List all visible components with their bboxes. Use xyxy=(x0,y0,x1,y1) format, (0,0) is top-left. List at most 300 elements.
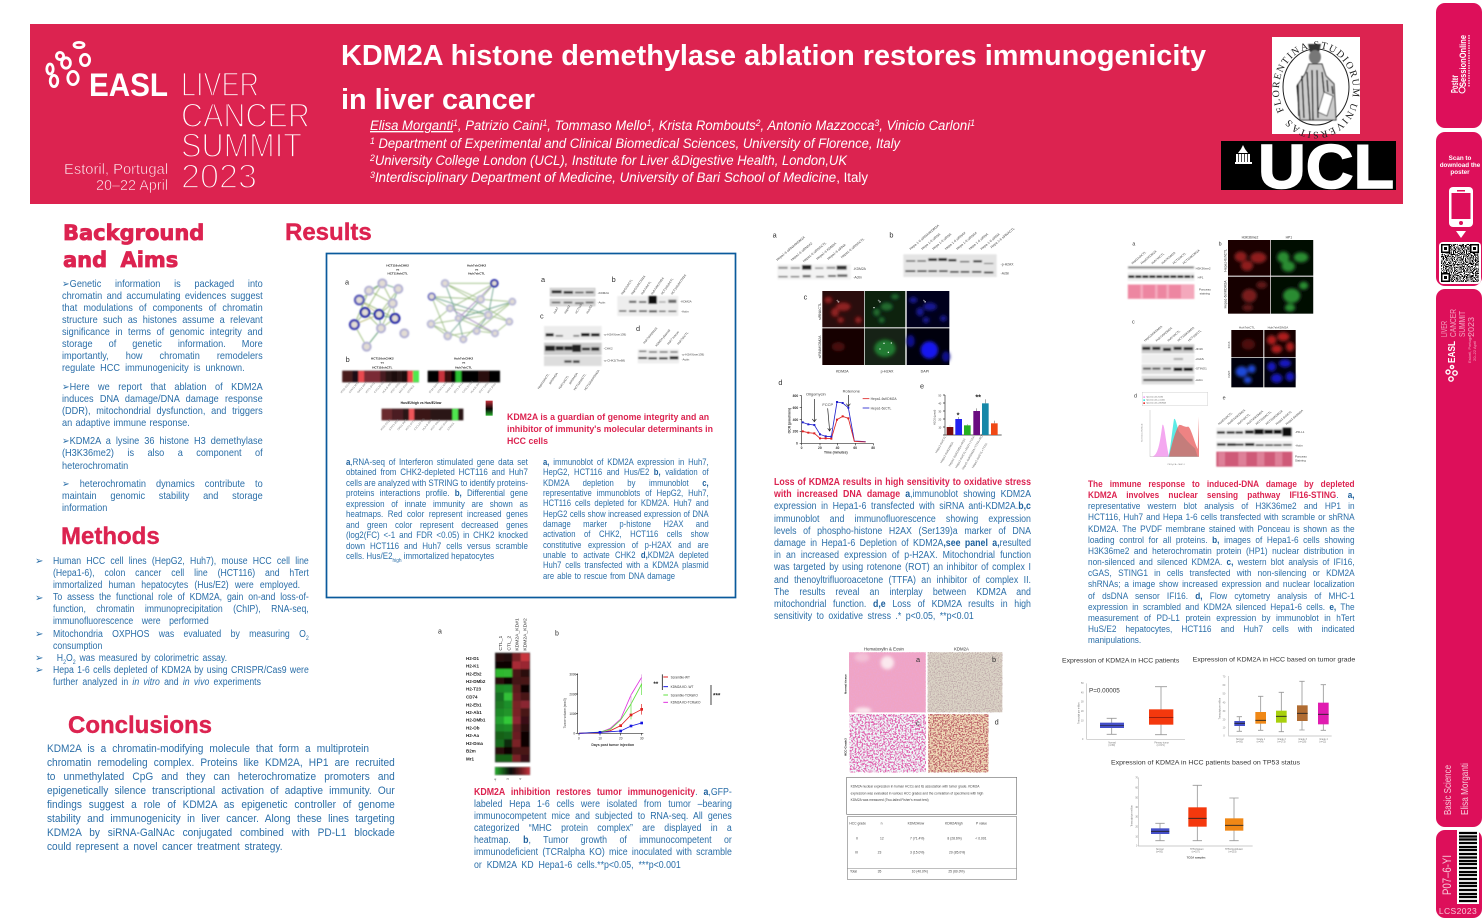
heading: Background and Aims xyxy=(63,221,204,272)
text: results caption right: activation of CHK2, HCT116 cells show xyxy=(543,528,709,539)
conference name: SUMMIT xyxy=(181,127,302,165)
figure: MHC heatmap: CTL_2 xyxy=(506,635,512,651)
network: Huh7 xyxy=(428,280,515,342)
heatmap gene labels: IFIT1 IFIT3 xyxy=(404,418,416,431)
sidebar: poster id and barcode xyxy=(1436,830,1482,918)
gene labels: H2-K1 xyxy=(466,664,479,669)
box plot: tumour grade: 0 xyxy=(1223,736,1225,738)
immunofluorescence panels: KDM2A xyxy=(836,369,849,373)
chart legend: Scramble-WT xyxy=(671,675,690,679)
figure: STRING networks and innate-immunity heatmaps: Huh7shCHK2 xyxy=(454,357,474,361)
figure: oxidative stress and DNA damage: b xyxy=(889,231,893,240)
blot labels: -KDM2A xyxy=(598,291,609,295)
heatmap gene labels: STING1 xyxy=(406,384,416,394)
text: oxidative stress caption: with increased DNA damage a,immunoblot showing KDM2A xyxy=(774,489,1031,500)
heatmap gene labels: IFIT1 IFIT3 xyxy=(453,381,465,394)
immunofluorescence panels: DAPI xyxy=(921,369,929,373)
authors and affiliations: , Antonio Mazzocca xyxy=(761,118,875,133)
authors and affiliations: 1 xyxy=(970,118,975,128)
chart: ROS bars: Hepa1-6siKDM2A+TTFA+ROT xyxy=(961,433,985,470)
blot labels: shKDM2A xyxy=(548,372,559,385)
chart titles: Expression of KDM2A in HCC based on tumor grade xyxy=(1193,656,1356,663)
box plot: tumour grade: Transcript per million xyxy=(1219,697,1222,719)
immunofluorescence panels: ⇘ xyxy=(923,298,927,303)
heatmap gene labels: OAS1 IRF7 xyxy=(356,381,368,394)
heatmap 3 xyxy=(382,409,463,420)
authors and affiliations: University College London (UCL), Institute for Liver &Digestive Health, London,UK xyxy=(375,153,848,168)
table: grade vs KDM2A: 25 (60.0%) xyxy=(948,869,965,873)
gene labels: H2-DMb1 xyxy=(466,718,486,723)
heatmap gene labels: IFI27 OAS2 xyxy=(478,380,490,394)
figure: IFI16-STING pathway: a xyxy=(1132,242,1135,248)
text: tumor immunogenicity caption: immunocompetent mice and subjected to RNA-seq. All genes xyxy=(474,811,732,822)
box plot: TP53 status: 0 xyxy=(1136,846,1138,848)
box plot: TP53 status: (n=50) xyxy=(1156,852,1163,854)
chart legend: Scramble-TCRaKO xyxy=(671,693,698,697)
figure: oxidative stress and DNA damage: c xyxy=(804,293,808,302)
text: nuclear sensing pathway caption: The immune response to induced-DNA damage by depleted xyxy=(1088,479,1355,490)
text: results caption right: representative immunoblots of HepG2, Huh7, xyxy=(543,487,709,498)
network: HCT116 xyxy=(350,279,408,351)
chart: ROS bars: H2O2 (µmol) xyxy=(933,410,937,425)
heatmap gene labels: STING1 xyxy=(446,421,456,431)
text: results caption left: a,RNA-seq of Interferon stimulated gene data set xyxy=(346,456,528,467)
chart: oxygen consumption: Hepa1-6sKDM2A xyxy=(871,397,897,401)
blot labels: HepG2shCTL xyxy=(1130,250,1147,265)
colour scale xyxy=(494,767,530,781)
table: grade vs KDM2A: 7 (71.4%) xyxy=(910,836,924,840)
sidebar: scan to download: download the xyxy=(1440,162,1481,169)
title: in liver cancer xyxy=(341,84,535,116)
chart: oxygen consumption: Time (minutes) xyxy=(824,450,848,454)
paragraph: heterochromatin dynamics xyxy=(62,479,263,514)
text: results caption left: expression of innate immunity are shown as xyxy=(346,498,528,509)
microscopy panels b xyxy=(1224,236,1313,314)
blot labels: HCT116shCTL xyxy=(660,277,675,296)
conference name: LIVER xyxy=(181,66,259,104)
blot labels: Huh7shKDM2A xyxy=(1246,409,1264,426)
box plot: TP53 status: 30 xyxy=(1135,817,1139,819)
box plot: HCC patients: 20 xyxy=(1081,711,1084,713)
blot labels xyxy=(1130,248,1307,462)
chart: ROS bars: ** xyxy=(975,393,981,402)
figure: STRING networks and innate-immunity heatmaps: vs xyxy=(475,267,479,271)
figure: IFI16-STING pathway xyxy=(1128,236,1313,467)
sidebar: scan to download: Scan to xyxy=(1449,155,1472,162)
blot labels: -IFI16 xyxy=(1195,347,1203,351)
box plot: TP53 status: 20 xyxy=(1135,826,1139,828)
authors and affiliations: , Vinicio Carloni xyxy=(879,118,971,133)
blot labels: HCT116CTL xyxy=(1187,329,1203,342)
box plot: HCC patients: P=0.00005 xyxy=(1089,688,1120,695)
box plot: tumour grade: 40 xyxy=(1223,702,1226,704)
box plot: HCC patients: (n=371) xyxy=(1157,745,1165,747)
table note xyxy=(847,777,1017,814)
sidebar: Poster Session Online: Poster xyxy=(1450,75,1461,93)
blot labels: HepG2shCTL xyxy=(537,372,550,390)
text: conclusions: stability and immunogenicity in liver cancer. Along these lines targeting xyxy=(47,813,395,825)
heatmap gene labels: OAS1 IRF7 xyxy=(444,381,456,394)
heatmap gene labels: IFI16 ISG15 xyxy=(379,417,392,431)
box plot: TP53 status: (n=107) xyxy=(1192,852,1200,854)
chart: ROS bars: 10 xyxy=(938,425,942,429)
blot labels: Hepa1-6 siRNA xyxy=(826,242,847,261)
heatmap gene labels: HLA-B IRF9 xyxy=(469,380,482,394)
box plot: HCC patients: Normal xyxy=(1108,741,1116,744)
blot labels: HepG2shKDM2A xyxy=(1143,325,1163,342)
gene labels: H2-DMb2 xyxy=(466,679,486,684)
authors and affiliations: 1 xyxy=(542,118,547,128)
text: nuclear sensing pathway caption: expression in scrambled and KDM2A silenced Hepa1-6 cells. e, The xyxy=(1088,602,1355,613)
blot labels: HCT116KDM2A xyxy=(1265,409,1284,426)
chart: tumour growth xyxy=(555,630,721,747)
table: grade vs KDM2A: 20 (85.0%) xyxy=(949,851,965,855)
text: tumor immunogenicity caption: heatmap. b, Tumor growth of immunocompetent or xyxy=(474,835,732,846)
paragraph: genetic information: significance in terms of genomic integrity and xyxy=(62,327,263,338)
chart: ROS bars xyxy=(933,393,1002,470)
icon: phone xyxy=(1449,187,1473,227)
blot labels: -Actin xyxy=(853,275,862,279)
blot labels: Huh7shCTL xyxy=(676,331,690,346)
authors and affiliations: 3 xyxy=(370,170,375,180)
heatmap gene labels: MX2 IFI44 xyxy=(438,419,449,431)
table: grade vs KDM2A: KDM2Alow xyxy=(908,822,925,826)
heatmap gene labels: IFI27 OAS2 xyxy=(429,418,442,431)
table: grade vs KDM2A: < 0.001 xyxy=(975,836,987,840)
figure: IFI16-STING pathway: c xyxy=(1132,320,1135,326)
microscopy panels c xyxy=(1227,325,1296,387)
blot labels: -cGAS xyxy=(1195,357,1204,361)
blot labels: Hepa1-6 siRNACTL xyxy=(802,241,827,263)
blot labels: Huh7 rescue xyxy=(666,330,680,346)
heatmap gene labels: IFI16 ISG15 xyxy=(339,380,352,394)
box plot: tumour grade: 50 xyxy=(1223,694,1226,696)
paragraph: heterochromatin dynamics: information xyxy=(62,503,107,514)
box plot: TP53 status: TCGA samples xyxy=(1187,856,1206,860)
chart: ROS bars: Hepa1-6siCTL xyxy=(934,435,947,454)
immunofluorescence panels: ⇘ xyxy=(836,298,840,303)
figure: KDM2A histology: a xyxy=(916,655,921,664)
blot labels: -Actin xyxy=(1195,378,1203,382)
chart: oxygen consumption: FCCP xyxy=(822,402,834,407)
text: tumor immunogenicity caption: immunodeficient (TCRalpha KO) mice inoculated with scramble xyxy=(474,847,732,858)
figure: KDM2A immunoblots in liver cell lines: b xyxy=(612,275,616,284)
blot labels: HCT116shCTL xyxy=(573,373,587,391)
blot labels: Huh7shKDM2A xyxy=(650,276,665,296)
blot labels: Huh7shCTL xyxy=(558,374,570,390)
paragraph: genetic information xyxy=(62,279,263,374)
blot labels: Hepa1-6 KDM2A xyxy=(815,241,838,261)
box plot: HCC patients: 30 xyxy=(1081,702,1084,704)
conference name: 2023 xyxy=(181,158,257,196)
paragraph: genetic information: structure such as histones assume a relevant xyxy=(62,315,263,326)
chart: ROS bars: 40 xyxy=(938,401,942,405)
blot labels: HusE2shKDM2A xyxy=(1226,408,1246,426)
gene labels: H2-Ab1 xyxy=(466,710,482,715)
text: methods: consumption xyxy=(53,641,102,652)
text: methods: Human HCC cell lines (HepG2, Huh7), mouse HCC cell line xyxy=(53,556,309,567)
heatmap gene labels: STAT1 MX1 xyxy=(436,380,448,394)
figure: MHC heatmap: KDM2A_KD#1 xyxy=(514,618,520,651)
sidebar: scan to download: poster xyxy=(1450,169,1470,176)
text: oxidative stress caption: and thenoyltrifluoroacetone (TTFA) an inhibitor of complex II. xyxy=(774,574,1031,586)
paragraph: heterochromatin dynamics: maintain genomic stability and storage xyxy=(62,491,263,502)
text: conclusions: epigenetically silence transcriptional activation of adaptive immunity. Our xyxy=(47,785,395,797)
text: ➢ xyxy=(35,665,43,676)
paragraph: ablation of KDM2A: ➢Here we report that ablation of KDM2A xyxy=(62,382,263,393)
logo: University of Florence seal: FLORENTINA STUDIORUM UNIVERSITAS xyxy=(1272,41,1360,138)
immunoblot b xyxy=(903,254,997,277)
box plot: TP53 status: 10 xyxy=(1135,836,1139,838)
text: background and aims xyxy=(62,279,263,514)
sidebar: conference and author: 2023 xyxy=(1467,316,1476,337)
chart: oxygen consumption: 800 xyxy=(793,394,798,398)
blot labels: Hepa 1-6 siRNA xyxy=(968,232,990,251)
box plot: tumour grade: Grade 3 xyxy=(1298,738,1307,741)
conference name xyxy=(64,66,310,196)
text: nuclear sensing pathway caption: representative western blot analysis of H3K36me2 and HP1 in xyxy=(1088,501,1355,512)
chart: ROS bars: * xyxy=(957,410,960,419)
blot labels: Hepa1-6 siRNA#KDM2A xyxy=(775,235,806,262)
blot labels: -Actin xyxy=(598,300,606,304)
paragraph: genetic information: that modulations of components of chromatin xyxy=(62,303,263,314)
blot labels: -KDM2A xyxy=(853,267,867,271)
box plot: HCC patients: 0 xyxy=(1082,739,1084,741)
text: nuclear sensing pathway caption: loading control for all proteins. b, images of Hepa1-6 cells showing xyxy=(1088,535,1355,546)
figure: KDM2A immunoblots in liver cell lines: c xyxy=(540,312,544,321)
blot labels: HepG2KDM2A xyxy=(1140,249,1157,265)
blot labels: HCT116shKDM2A xyxy=(670,273,687,296)
box plot: tumour grade xyxy=(1219,676,1332,744)
text: oxidative stress caption: was targeted by using rotenone (ROT) an inhibitor of complex I xyxy=(774,562,1031,573)
blot labels: HCT116CTL xyxy=(1172,251,1187,265)
blot labels: KDM2A plasmid xyxy=(654,328,671,347)
box plot: HCC patients: (n=50) xyxy=(1108,745,1115,747)
figure: STRING networks and innate-immunity heatmaps: Huh7shCTL xyxy=(468,271,485,275)
figure: MHC heatmap: CTL_1 xyxy=(498,635,504,651)
blot labels: Hepa 1-6 siRNACTL xyxy=(990,226,1016,249)
microscopy panels b: HP1 xyxy=(1286,236,1292,240)
blot labels: Hepa1-6KDM2A xyxy=(1285,409,1304,426)
heatmap gene labels: IFI27 OAS2 xyxy=(389,380,402,394)
title xyxy=(341,40,1206,116)
paragraph: heterochromatin dynamics: ➢ heterochromatin dynamics contribute to xyxy=(62,479,263,490)
chart: ROS bars: 30 xyxy=(938,409,942,413)
text: results caption right: Huh7 cells transfected with a KDM2A plasmid xyxy=(543,559,709,570)
text: conclusions: KDM2A is a chromatin-modifying molecule that form a multiprotein xyxy=(47,743,369,755)
table: grade vs KDM2A: 8 (28.6%) xyxy=(947,836,962,840)
text: methods: (Hepa1-6), colon cancer cell line (HCT116) and hTert xyxy=(53,568,309,579)
icon: arrow down xyxy=(1456,231,1466,238)
sidebar: conference and author: SUMMIT xyxy=(1458,311,1467,337)
text: ➢ xyxy=(35,556,43,567)
text: conclusions: to unmethylated CpG and they can heterochromatize promoters and xyxy=(47,771,395,783)
blot d xyxy=(638,349,679,363)
heatmap gene labels: IFIT1 IFIT3 xyxy=(364,381,376,394)
blot labels: HusE2shCTL xyxy=(1217,411,1233,426)
text: oxidative stress caption: in an increased expression of p-H2AX. Mitochondrial function xyxy=(774,550,1031,561)
heading: Methods: Methods xyxy=(61,523,160,550)
chart: tumour growth: 20 xyxy=(619,736,623,740)
blot labels: -Actin xyxy=(681,310,689,314)
blot labels: -p-CHK2(Thr68) xyxy=(604,358,625,362)
blot labels: Hepa 1-6 siRNA# xyxy=(955,231,978,251)
colour scale: 4 xyxy=(518,778,522,780)
box plot: tumour grade: (n=54) xyxy=(1257,742,1264,744)
chart: oxygen consumption: 60 xyxy=(853,446,857,450)
text: methods: immunofluorescence were performed xyxy=(53,616,209,627)
figure: STRING networks and innate-immunity heatmaps: Huh7shCHK2 xyxy=(467,263,487,267)
figure: oxidative stress and DNA damage xyxy=(773,223,1016,470)
text: methods: Mitochondria OXPHOS was evaluated by measuring O2 xyxy=(53,629,309,642)
heatmap gene labels: OAS1 IRF7 xyxy=(396,418,408,431)
chart legend: KDM2A KD-TCRaKO xyxy=(671,701,701,705)
sidebar: conference and author: Basic Science xyxy=(1442,765,1454,815)
figure: STRING networks and innate-immunity heatmaps: vs xyxy=(381,361,384,365)
paragraph: genetic information: ➢Genetic information is packaged into xyxy=(62,279,263,290)
text: nuclear sensing pathway caption: measurement of PD-L1 protein expression by immunoblot in hTert xyxy=(1088,613,1355,624)
blot labels: Ponceau xyxy=(1199,287,1211,291)
callout: guardian of genome integrity xyxy=(507,412,713,447)
figure: KDM2A immunoblots in liver cell lines xyxy=(537,273,704,391)
blot labels: -Actin xyxy=(1295,443,1303,447)
figure: IFI16-STING pathway: e xyxy=(1223,396,1226,402)
text: results caption left: down HCT116 and Huh7 cells versus scramble xyxy=(346,540,528,550)
text: results caption left xyxy=(346,456,528,564)
figure: STRING networks and innate-immunity heatmaps: HCT116shCHK2 xyxy=(371,357,394,361)
chart: ROS bars: Hepa1-6siKDM2A+ROT xyxy=(947,437,967,467)
flow cytometry xyxy=(1140,392,1208,466)
results box frame xyxy=(326,254,736,598)
box plot: HCC patients: 50 xyxy=(1081,683,1084,685)
figure: STRING networks and innate-immunity heatmaps: vs xyxy=(462,361,466,365)
text: results caption right xyxy=(543,456,709,581)
text: results caption left: cells. Hus/E2high immortalized hepatocytes xyxy=(346,550,494,564)
blot labels: HCT116 xyxy=(574,303,583,314)
chart titles: Expression of KDM2A in HCC patients based on TP53 status xyxy=(1111,759,1301,766)
header banner xyxy=(30,24,1403,204)
box plot: tumour grade: Grade 1 xyxy=(1257,738,1266,741)
histology panel c xyxy=(850,714,926,772)
blot labels: Hepa 1-6 siRNA xyxy=(980,232,1001,251)
blot labels xyxy=(775,223,1016,279)
authors and affiliations: , Krista Rombouts xyxy=(651,118,756,133)
text: tumor immunogenicity caption: categorized “MHC protein complex” are displayed in a xyxy=(474,823,732,834)
text: oxidative stress caption: sensitivity to oxidative stress .* p<0.05, **p<0.01 xyxy=(774,611,974,622)
text: oxidative stress caption: expression in Hepa1-6 transfected with siRNA anti-KDM2A.b,c xyxy=(774,501,1031,512)
box plot: tumour grade: (n=118) xyxy=(1298,742,1306,744)
box plot: tumour grade: 10 xyxy=(1223,728,1226,730)
box plot: tumour grade: 60 xyxy=(1223,685,1226,687)
blot labels: HCT116shCTL xyxy=(1255,410,1273,426)
chart: oxygen consumption: 0 xyxy=(801,446,803,450)
authors and affiliations: 3 xyxy=(874,118,879,128)
table: grade vs KDM2A: 3 (15.0%) xyxy=(910,851,924,855)
table: grade vs KDM2A: II xyxy=(856,836,858,840)
heatmap gene labels: STAT1 MX1 xyxy=(388,418,400,431)
heatmap gene labels: CXCL10 ISG xyxy=(461,380,474,394)
box plot: tumour grade: 70 xyxy=(1223,676,1226,678)
text: results caption right: a, immunoblot of KDM2A expression in Huh7, xyxy=(543,456,709,467)
blot b xyxy=(617,296,678,316)
text: results caption right: KDM2A depletion by immunoblot c, xyxy=(543,477,709,488)
blot labels: -Actin xyxy=(1001,271,1009,275)
box plot: tumour grade: 30 xyxy=(1223,711,1226,713)
sidebar: conference and author: Estoril, Portugal xyxy=(1467,335,1472,363)
chart legend: KDM2A KD -WT xyxy=(671,685,694,689)
text: oxidative stress caption: levels of phospho-histone H2AX (Ser139)a marker of DNA xyxy=(774,526,1031,537)
text: tumor immunogenicity caption xyxy=(474,787,732,871)
blot a xyxy=(550,288,595,306)
paragraph: ablation of KDM2A xyxy=(62,382,263,429)
text: conclusions xyxy=(47,743,395,853)
box plot: tumour grade: Grade 4 xyxy=(1319,738,1328,741)
gene labels: H2-Ob xyxy=(466,725,480,730)
sidebar: Poster Session Online: SessionOnline xyxy=(1458,35,1469,87)
blot labels: staining xyxy=(1200,291,1210,295)
paragraph: lysine 36 demethylase: heterochromatin xyxy=(62,461,128,472)
text: results caption left: and green color represent decreased genes xyxy=(346,519,528,530)
text: methods: To assess the functional role of KDM2A, gain on-and loss-of- xyxy=(53,592,309,603)
blot labels: -KDM2A xyxy=(680,300,692,304)
authors and affiliations xyxy=(369,118,975,185)
blot labels: Hepa 1-6 siRNA xyxy=(920,232,942,251)
figure: IFI16-STING pathway: d xyxy=(1134,394,1137,400)
heatmap 2 xyxy=(428,371,500,382)
blot labels: -p-H2AX(ser139) xyxy=(682,352,704,356)
text: nuclear sensing pathway caption: cGAS, STING1 in cells transfected with non-silencing or KDM2A xyxy=(1088,568,1355,579)
text: tumor immunogenicity caption: KDM2A inhibition restores tumor immunogenicity. a,GFP- xyxy=(474,787,732,798)
immunofluorescence panels: p-H2AX xyxy=(881,369,894,373)
EASL logo mark xyxy=(47,42,90,87)
blot labels: -PD-L1 xyxy=(1295,430,1305,434)
chart: tumour growth: Tumor volume (mm3) xyxy=(563,698,567,728)
microscopy panels b: Hepa1-6shKDM2A xyxy=(1224,280,1228,308)
box plot: HCC patients: Primary tumor xyxy=(1154,741,1169,744)
figure: STRING networks and innate-immunity heatmaps xyxy=(339,263,515,431)
authors and affiliations: 1 xyxy=(453,118,458,128)
chart: tumour growth: ** xyxy=(653,681,659,688)
conference name: CANCER xyxy=(181,97,310,135)
chart: ROS bars: Hepa1-6siCTL+TTFA xyxy=(971,442,988,469)
text: oxidative stress caption xyxy=(774,477,1031,622)
paragraph: ablation of KDM2A: an adaptive immune response. xyxy=(62,418,190,429)
sidebar: conference and author: LIVER xyxy=(1440,321,1449,337)
table: grade vs KDM2A: 10 (40.0%) xyxy=(912,869,928,873)
box plot: TP53 status: TP53-NonMutant xyxy=(1225,848,1243,851)
histology panel d xyxy=(928,714,988,772)
chart: tumour growth: 0 xyxy=(573,732,575,736)
figure: STRING networks and innate-immunity heatmaps: Hus/E2high vs Hus/E2low xyxy=(401,401,442,405)
chart: oxygen consumption: Oligomycin xyxy=(806,392,826,397)
heading: Results: Results xyxy=(285,219,372,246)
authors and affiliations: , Italy xyxy=(836,170,868,185)
text: tumor immunogenicity caption: or KDM2A KD Hepa1-6 cells.**p<0.05, ***p<0.001 xyxy=(474,860,681,871)
text: nuclear sensing pathway caption: shRNAs; a image show increased expression and nuclear localization xyxy=(1088,579,1355,590)
QR code xyxy=(1439,242,1481,284)
text: ➢ xyxy=(35,593,43,604)
text: results caption right: unable to activate CHK2 d,KDM2A depleted xyxy=(543,549,709,560)
gene labels: H2-Eb1 xyxy=(466,702,482,707)
figure: MHC heatmap: KDM2A_KD#2 xyxy=(523,618,529,651)
text: results caption left: cells are analyzed with STRING to identify proteins- xyxy=(346,477,528,488)
blot labels: Huh7shKDM2A xyxy=(1155,326,1173,342)
blot labels: HP1 xyxy=(1198,275,1204,279)
title: KDM2A histone demethylase ablation restores immunogenicity xyxy=(341,40,1206,72)
blot labels: Hepa1-6 siRNA#2 xyxy=(790,241,813,262)
table note: expression was evaluated in various HCC grades and the correlation of specimens with high xyxy=(851,791,983,795)
conference name: 20–22 April xyxy=(96,177,168,194)
